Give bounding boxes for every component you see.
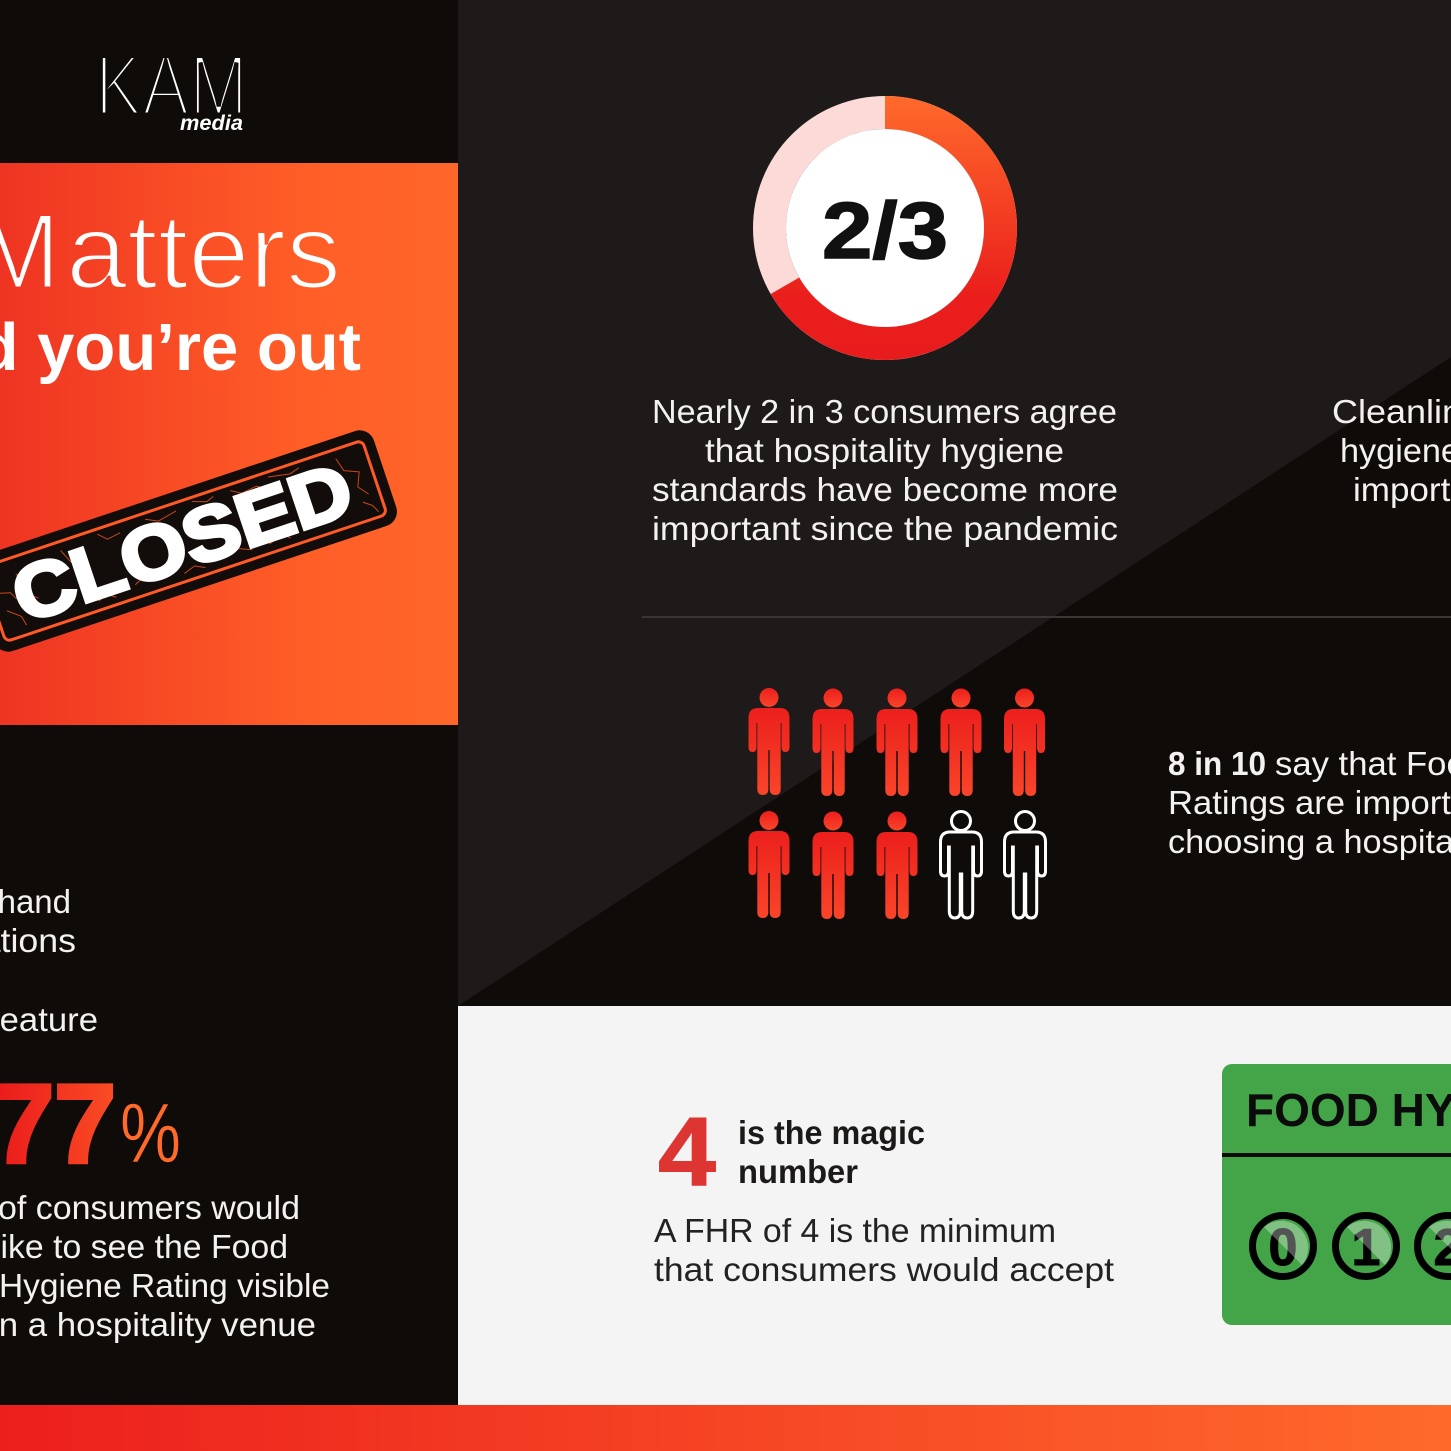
- title: Matters: atters: [66, 191, 341, 311]
- chart: 2/3 donut: [770, 112, 1001, 344]
- background: right dark panel: [458, 0, 1451, 1006]
- text block: left column intro: [0, 883, 98, 1038]
- stat: 77%: %: [120, 1086, 181, 1180]
- background: left dark column: [0, 0, 458, 1405]
- stamp: CLOSED: CLOSED: [2, 447, 363, 639]
- rating 1: [1336, 1216, 1396, 1277]
- text block: 77% description: like to see the Food: [0, 1228, 288, 1265]
- stat: 77%: [0, 1062, 181, 1186]
- logo: KAM media: KAM: [95, 38, 248, 134]
- panel: light lower section: [458, 1006, 1451, 1405]
- text block: 77% description: in a hospitality venue: [0, 1306, 316, 1343]
- stat: 4 is the magic number: number: [738, 1153, 858, 1190]
- rating 0: [1252, 1216, 1314, 1277]
- text block: 2 in 3 consumers: standards have become more: [652, 471, 1118, 508]
- stamp: CLOSED: [0, 426, 401, 656]
- text block: 8 in 10 (cropped): 8 in 10: [1168, 745, 1266, 782]
- panel: orange title block: [0, 163, 458, 725]
- text block: 77% description: Hygiene Rating visible: [0, 1267, 330, 1304]
- chart: 8 in 10 people pictogram: [748, 688, 1046, 919]
- text block: 77% description: [0, 1189, 330, 1343]
- stat: 4 is the magic number: 4: [658, 1097, 716, 1206]
- text block: 77% description: of consumers would: [0, 1189, 300, 1226]
- stat: 4 is the magic number: is the magic: [738, 1114, 925, 1151]
- stat: 4 is the magic number: [658, 1097, 925, 1206]
- text block: FHR minimum: A FHR of 4 is the minimum: [654, 1212, 1056, 1249]
- text block: FHR minimum: [654, 1212, 1114, 1288]
- rating 2: [1418, 1216, 1451, 1277]
- logo: KAM media: media: [180, 112, 243, 135]
- text block: 2 in 3 consumers: that hospitality hygiene: [705, 432, 1064, 469]
- rating 1: 1: [1352, 1219, 1380, 1277]
- panel: food hygiene rating sticker: [1222, 1064, 1451, 1325]
- text block: 8 in 10 (cropped): [1168, 745, 1451, 860]
- donut value: 2/3: [822, 186, 948, 275]
- text block: 2 in 3 consumers: [652, 393, 1118, 547]
- rating 0: 0: [1269, 1219, 1297, 1277]
- text block: 2 in 3 consumers: Nearly 2 in 3 consumers agree: [652, 393, 1117, 430]
- text block: cleanliness (cropped): [1332, 393, 1451, 508]
- footer gradient bar: [0, 1405, 1451, 1451]
- text block: 2 in 3 consumers: important since the pandemic: [652, 510, 1118, 547]
- text block: FHR minimum: that consumers would accept: [654, 1251, 1114, 1288]
